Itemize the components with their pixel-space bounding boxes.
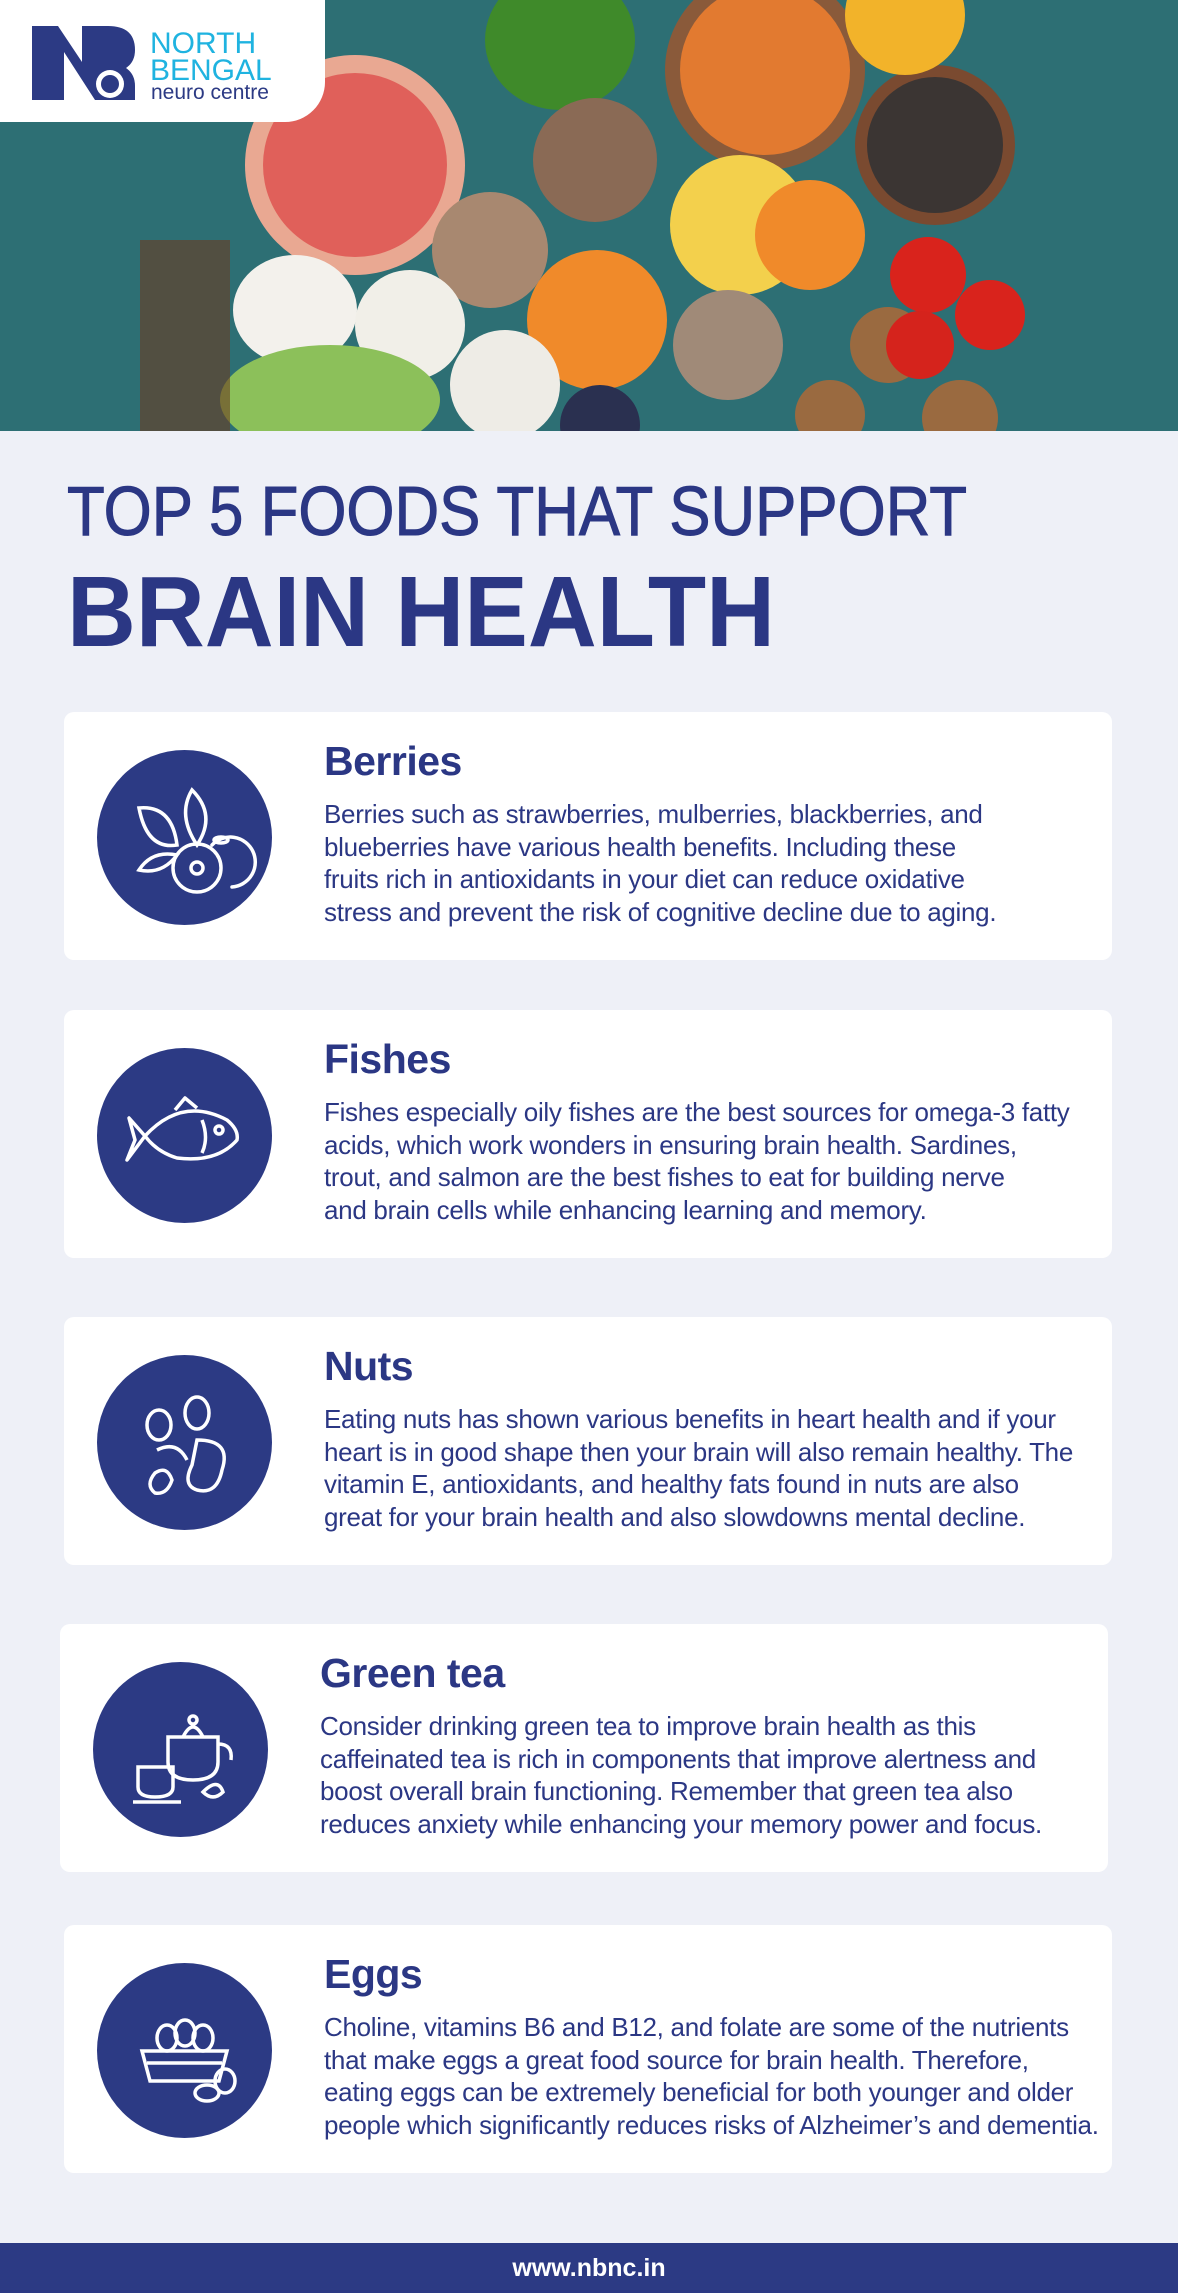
icon: berries <box>97 750 272 925</box>
card: nuts <box>64 1317 1112 1565</box>
title: TOP 5 FOODS THAT SUPPORT <box>67 472 967 550</box>
text <box>324 1097 1070 1225</box>
title: BRAIN HEALTH <box>67 556 775 668</box>
logo: neuro centre <box>151 81 269 104</box>
text: trout, and salmon are the best fishes to eat for building nerve <box>324 1162 1005 1192</box>
text: Eating nuts has shown various benefits in heart health and if your <box>324 1404 1056 1434</box>
heading: Eggs <box>324 1951 422 1997</box>
card: green tea <box>60 1624 1108 1872</box>
text <box>324 1404 1073 1532</box>
icon: teapot <box>93 1662 268 1837</box>
text: stress and prevent the risk of cognitive decline due to aging. <box>324 897 996 927</box>
text: great for your brain health and also slowdowns mental decline. <box>324 1502 1025 1532</box>
text: heart is in good shape then your brain will also remain healthy. The <box>324 1437 1073 1467</box>
logo <box>0 0 325 122</box>
text: Berries such as strawberries, mulberries, blackberries, and <box>324 799 983 829</box>
logo: BENGAL <box>150 54 272 87</box>
text: fruits rich in antioxidants in your diet can reduce oxidative <box>324 864 965 894</box>
title <box>67 472 967 668</box>
text: caffeinated tea is rich in components that improve alertness and <box>320 1744 1036 1774</box>
icon: nuts <box>97 1355 272 1530</box>
card: fishes <box>64 1010 1112 1258</box>
logo: NORTH <box>150 27 256 60</box>
text <box>320 1711 1042 1839</box>
footer <box>0 2243 1178 2293</box>
icon: eggs basket <box>97 1963 272 2138</box>
text: people which significantly reduces risks of Alzheimer’s and dementia. <box>324 2110 1099 2140</box>
footer: www.nbnc.in <box>512 2254 666 2282</box>
text: blueberries have various health benefits. Including these <box>324 832 956 862</box>
text: boost overall brain functioning. Remember that green tea also <box>320 1776 1013 1806</box>
text: vitamin E, antioxidants, and healthy fats found in nuts are also <box>324 1469 1019 1499</box>
heading: Berries <box>324 738 462 784</box>
text: and brain cells while enhancing learning and memory. <box>324 1195 926 1225</box>
heading: Fishes <box>324 1036 451 1082</box>
text: that make eggs a great food source for brain health. Therefore, <box>324 2045 1029 2075</box>
card: berries <box>64 712 1112 960</box>
hero photo: food <box>0 0 1178 431</box>
text <box>324 2012 1099 2140</box>
text: acids, which work wonders in ensuring brain health. Sardines, <box>324 1130 1017 1160</box>
text: Fishes especially oily fishes are the best sources for omega-3 fatty <box>324 1097 1070 1127</box>
text: eating eggs can be extremely beneficial for both younger and older <box>324 2077 1073 2107</box>
text: Choline, vitamins B6 and B12, and folate are some of the nutrients <box>324 2012 1069 2042</box>
heading: Green tea <box>320 1650 505 1696</box>
card: eggs <box>64 1925 1112 2173</box>
heading: Nuts <box>324 1343 413 1389</box>
text: reduces anxiety while enhancing your memory power and focus. <box>320 1809 1042 1839</box>
text <box>324 799 996 927</box>
text: Consider drinking green tea to improve brain health as this <box>320 1711 976 1741</box>
icon: fish <box>97 1048 272 1223</box>
